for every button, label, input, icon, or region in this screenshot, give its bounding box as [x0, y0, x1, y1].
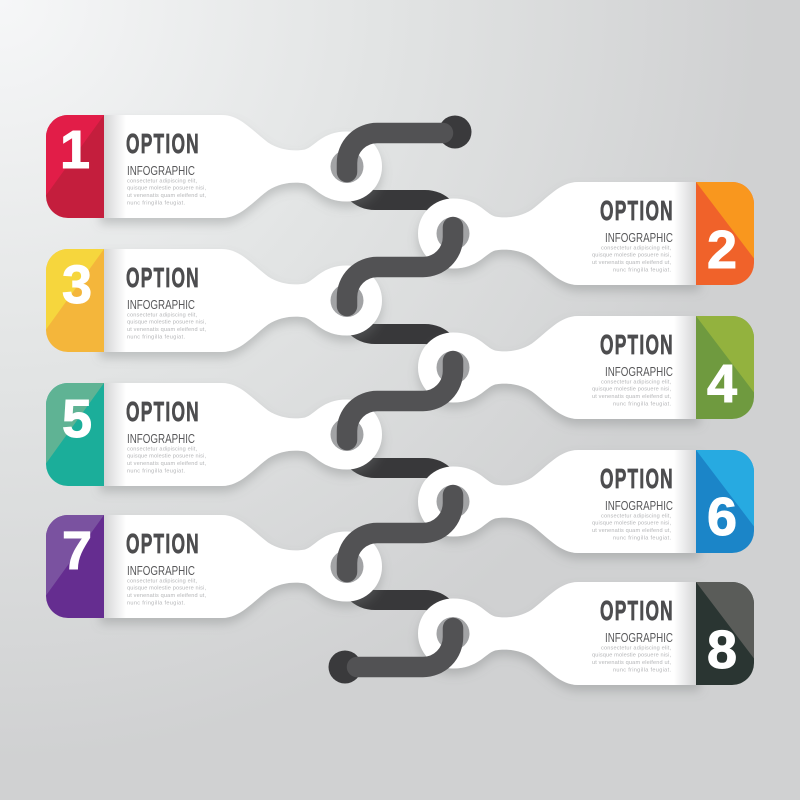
body text 8: nunc fringilla feugiat.: [613, 668, 671, 674]
body text 6: nunc fringilla feugiat.: [613, 536, 671, 542]
body text 2: ut venenatis quam eleifend ut,: [592, 260, 671, 266]
heading option 3: OPTION: [126, 262, 200, 293]
panel: option 8: [418, 582, 754, 685]
body text 2: quisque molestie posuere nisi,: [592, 252, 671, 258]
body text 7: nunc fringilla feugiat.: [127, 600, 185, 606]
subheading 2: INFOGRAPHIC: [605, 230, 673, 245]
tag shape 3: [46, 249, 382, 352]
body text 1: ut venenatis quam eleifend ut,: [127, 193, 206, 199]
body text 7: quisque molestie posuere nisi,: [127, 586, 206, 592]
body text 5: ut venenatis quam eleifend ut,: [127, 461, 206, 467]
body text 3: [127, 312, 206, 340]
number 2: 2: [707, 220, 737, 280]
number 7: 7: [62, 521, 92, 581]
body text 5: quisque molestie posuere nisi,: [127, 454, 206, 460]
body text 8: ut venenatis quam eleifend ut,: [592, 660, 671, 666]
body text 4: quisque molestie posuere nisi,: [592, 386, 671, 392]
body text 5: consectetur adipiscing elit,: [127, 446, 197, 452]
heading option 2: OPTION: [600, 195, 674, 226]
heading option 7: OPTION: [126, 528, 200, 559]
panel: option 6: [418, 450, 754, 553]
subheading 8: INFOGRAPHIC: [605, 630, 673, 645]
heading option 4: OPTION: [600, 329, 674, 360]
body text 5: [127, 446, 206, 474]
heading option 8: OPTION: [600, 595, 674, 626]
body text 2: nunc fringilla feugiat.: [613, 268, 671, 274]
body text 7: [127, 578, 206, 606]
number 4: 4: [707, 354, 737, 414]
panel: option 2: [418, 182, 754, 285]
panel: option 5: [46, 383, 382, 486]
subheading 3: INFOGRAPHIC: [127, 297, 195, 312]
body text 6: consectetur adipiscing elit,: [601, 514, 671, 520]
number 6: 6: [707, 487, 737, 547]
body text 8: [592, 646, 671, 674]
chain links in front of the rings: [328, 116, 472, 684]
number 8: 8: [707, 620, 737, 680]
subheading 1: INFOGRAPHIC: [127, 163, 195, 178]
number 5: 5: [62, 389, 92, 449]
panel: option 3: [46, 249, 382, 352]
panel: option 4: [418, 316, 754, 419]
tag shape 5: [46, 383, 382, 486]
subheading 6: INFOGRAPHIC: [605, 498, 673, 513]
tag shape 1: [46, 115, 382, 218]
body text 3: quisque molestie posuere nisi,: [127, 320, 206, 326]
subheading 5: INFOGRAPHIC: [127, 431, 195, 446]
body text 8: quisque molestie posuere nisi,: [592, 652, 671, 658]
subheading 7: INFOGRAPHIC: [127, 563, 195, 578]
panel: option 1: [46, 115, 382, 218]
body text 2: consectetur adipiscing elit,: [601, 246, 671, 252]
body text 4: [592, 380, 671, 408]
body text 1: [127, 178, 206, 206]
body text 3: consectetur adipiscing elit,: [127, 312, 197, 318]
body text 3: ut venenatis quam eleifend ut,: [127, 327, 206, 333]
body text 6: [592, 514, 671, 542]
tag shape 4: [418, 316, 754, 419]
tag shape 2: [418, 182, 754, 285]
body text 7: consectetur adipiscing elit,: [127, 578, 197, 584]
body text 8: consectetur adipiscing elit,: [601, 646, 671, 652]
body text 1: nunc fringilla feugiat.: [127, 200, 185, 206]
tag shape 6: [418, 450, 754, 553]
heading option 5: OPTION: [126, 396, 200, 427]
body text 4: ut venenatis quam eleifend ut,: [592, 394, 671, 400]
tag shape 7: [46, 515, 382, 618]
body text 7: ut venenatis quam eleifend ut,: [127, 593, 206, 599]
number 1: 1: [60, 120, 90, 180]
heading option 6: OPTION: [600, 463, 674, 494]
body text 2: [592, 246, 671, 274]
subheading 4: INFOGRAPHIC: [605, 364, 673, 379]
panel: option 7: [46, 515, 382, 618]
tag shape 8: [418, 582, 754, 685]
body text 3: nunc fringilla feugiat.: [127, 334, 185, 340]
body text 4: consectetur adipiscing elit,: [601, 380, 671, 386]
body text 6: ut venenatis quam eleifend ut,: [592, 528, 671, 534]
body text 4: nunc fringilla feugiat.: [613, 402, 671, 408]
body text 1: consectetur adipiscing elit,: [127, 178, 197, 184]
body text 5: nunc fringilla feugiat.: [127, 468, 185, 474]
number 3: 3: [62, 255, 92, 315]
body text 6: quisque molestie posuere nisi,: [592, 520, 671, 526]
body text 1: quisque molestie posuere nisi,: [127, 186, 206, 192]
heading option 1: OPTION: [126, 128, 200, 159]
chain links behind the rings: [347, 172, 453, 628]
